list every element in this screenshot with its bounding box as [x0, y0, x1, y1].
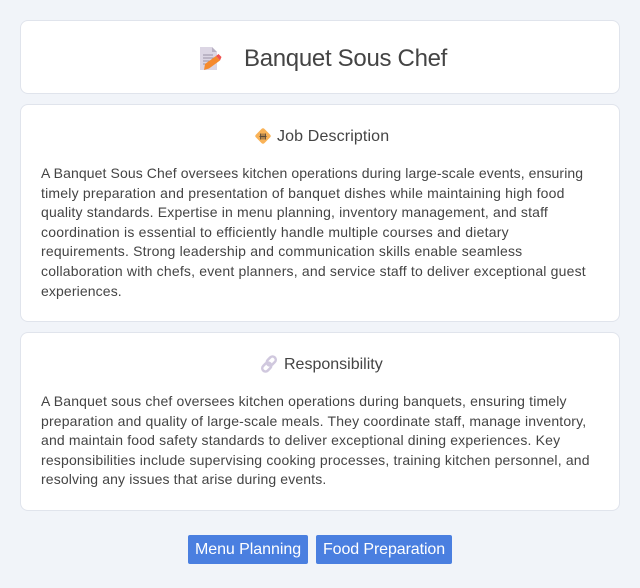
tag: menu planning [188, 535, 308, 564]
text block: job description: requirements. Strong leadership and communication skills enable seamless [41, 243, 522, 259]
heading: job description: Job Description [277, 128, 389, 145]
text block: job description [41, 165, 586, 299]
text block: job description: quality standards. Expertise in menu planning, inventory management, and staff [41, 204, 548, 220]
panel: responsibility [20, 332, 620, 511]
heading: responsibility: Responsibility [284, 356, 383, 373]
text block: responsibility: A Banquet sous chef oversees kitchen operations during banquets, ensuring timely [41, 393, 567, 409]
title text: Banquet Sous Chef [244, 45, 447, 72]
icon: chain link [261, 355, 277, 373]
text block: responsibility [41, 393, 590, 487]
panel: title [20, 20, 620, 94]
text block: job description: A Banquet Sous Chef oversees kitchen operations during large-scale events, ensuring [41, 165, 583, 181]
text block: responsibility: responsibilities include supervising cooking processes, training kitchen personnel, and [41, 452, 590, 468]
icon: document with pencil [200, 47, 222, 70]
tag: menu planning: Menu Planning [195, 541, 301, 558]
icon: diamond sign [255, 128, 271, 144]
text block: job description: collaboration with chefs, event planners, and service staff to deliver exceptional guest [41, 263, 586, 279]
text block: responsibility: preparation and quality of large-scale meals. They coordinate staff, manage inventory, [41, 413, 586, 429]
tag: food preparation: Food Preparation [323, 541, 445, 558]
text block: job description: coordination is essential to efficiently handle multiple courses and dietary [41, 224, 509, 240]
panel: job description [20, 104, 620, 322]
text block: job description: timely preparation and presentation of banquet dishes while maintaining high food [41, 185, 565, 201]
text block: job description: experiences. [41, 283, 122, 299]
text block: responsibility: and maintain food safety standards to deliver exceptional dining experiences. Key [41, 432, 560, 448]
text block: responsibility: resolving any issues that arise during events. [41, 471, 326, 487]
tag: food preparation [316, 535, 452, 564]
